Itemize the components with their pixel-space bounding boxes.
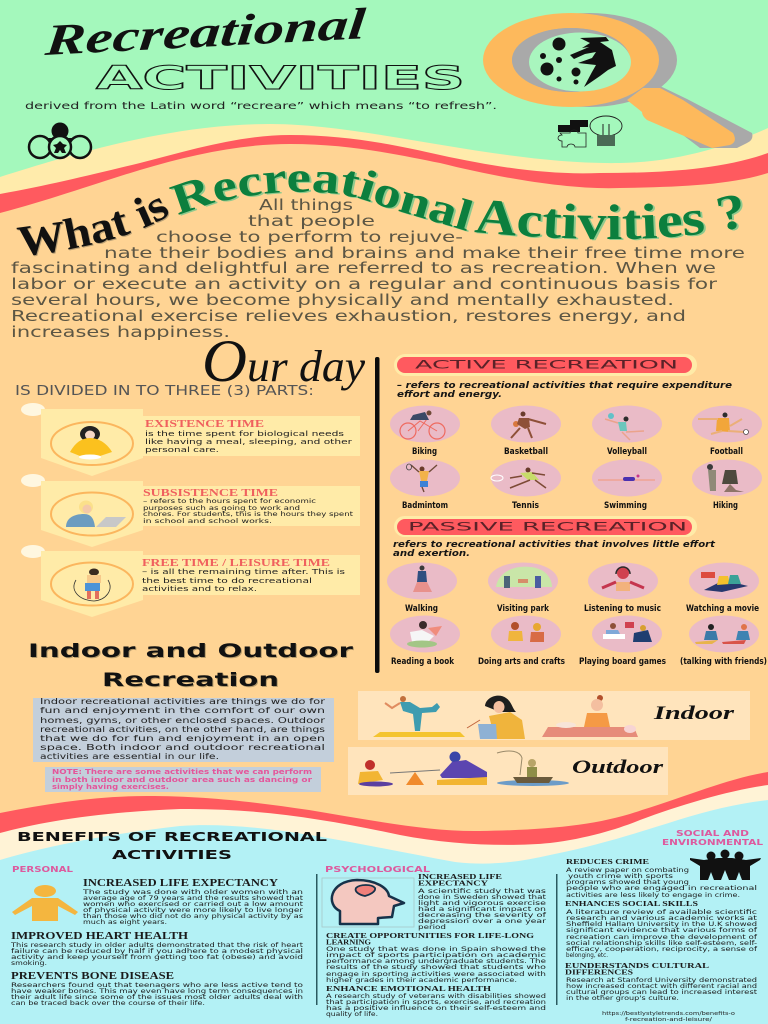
activity: doing arts and crafts: Doing arts and crafts (478, 656, 565, 666)
column: psychological benefits: ENHANCE EMOTIONAL HEALTH (326, 984, 491, 993)
column: social and environmental benefits: programs showed that young (566, 880, 689, 886)
activity: football: Football (710, 446, 743, 456)
panel: free time: activities and to relax. (142, 584, 257, 593)
icon: three people (690, 850, 761, 880)
column: psychological benefits: done in Sweden showed that (418, 895, 547, 901)
intro paragraph: nate their bodies and brains and make their free time more (104, 244, 745, 262)
activity: visiting park (488, 562, 558, 613)
text block: indoor and outdoor definition: that we do for fun and enjoyment in an open (40, 733, 325, 743)
note callout: NOTE: There are some activities that we can perform (52, 768, 312, 776)
source link text: f-recreation-and-leisure/ (625, 1017, 712, 1023)
passive recreation description: refers to recreational activities that involves little effort (393, 539, 716, 549)
column: psychological benefits: decreasing the severity of (418, 913, 548, 919)
subtitle: derived from the Latin word “recreare” which means “to refresh”. (25, 101, 497, 112)
column: personal benefits: their adult life since some of the issues most older adults deal with (11, 995, 303, 1001)
text block: indoor and outdoor definition: homes, gyms, or other enclosed spaces. Outdoor (40, 715, 326, 725)
activity: badminton: Badmintom (402, 500, 448, 510)
illustration: yoga pose (373, 696, 465, 737)
panel: free time (21, 545, 360, 617)
heading: indoor and outdoor recreation: Indoor and Outdoor (28, 640, 354, 662)
heading: benefits (17, 829, 327, 862)
icon: puzzle and light bulb (558, 116, 622, 147)
panel: subsistence time: in school and school works. (143, 518, 272, 525)
icon: person in yellow hoodie (70, 426, 112, 460)
panel: existence time: personal care. (145, 445, 219, 454)
activity: badminton (390, 460, 460, 510)
column: social and environmental benefits: people who are engaged in recreational (566, 886, 758, 892)
activity: playing board games (579, 616, 666, 666)
column: personal benefits: of physical activity were more likely to live longer (83, 908, 304, 914)
intro paragraph: labor or execute an activity on a regular and continuous basis for (11, 275, 718, 293)
intro paragraph: choose to perform to rejuve- (156, 228, 463, 246)
column: social and environmental benefits: how increased contact with different racial and (566, 984, 757, 990)
column: social and environmental benefits: DIFFERENCES (565, 968, 633, 976)
column: social and environmental benefits: youth crime with sports (568, 874, 673, 880)
label: social and environmental: SOCIAL AND (676, 829, 749, 838)
note callout: simply having exercises. (52, 783, 169, 791)
heading: What is (16, 198, 170, 256)
panel: existence time: like having a meal, sleeping, and other (145, 437, 353, 446)
column: social and environmental benefits: belonging, etc. (566, 953, 608, 959)
icon: child with jump rope (74, 568, 110, 601)
column: social and environmental benefits: Research at Stanford University demonstrated (566, 978, 757, 984)
heading: Activities ?: Activities ? (474, 196, 742, 240)
text block: indoor and outdoor definition: space. Both indoor and outdoor recreational (40, 742, 325, 752)
activity: watching a movie (686, 562, 759, 613)
column: social and environmental benefits: REDUCES CRIME (566, 857, 649, 866)
activity: walking: Walking (405, 603, 438, 613)
vertical divider (375, 357, 380, 673)
column: social and environmental benefits: social relationship skills like self-esteem, self- (566, 941, 757, 947)
column: personal benefits: IMPROVED HEART HEALTH (11, 931, 188, 942)
icon: person with laptop (66, 500, 126, 527)
activity: hiking (692, 460, 762, 510)
column: social and environmental benefits (565, 857, 758, 1002)
text block: indoor and outdoor definition: recreational activities, on the other hand, are things (40, 724, 325, 734)
subheading: three parts: IS DIVIDED IN TO THREE (3) PARTS: (15, 384, 314, 399)
column: psychological benefits: depression over a one year (418, 919, 547, 925)
heading: indoor and outdoor recreation: Recreation (102, 669, 279, 691)
activity: talking with friends (680, 616, 767, 666)
text block: indoor and outdoor definition: Indoor recreational activities are things we do for (40, 696, 326, 706)
pill: passive recreation: PASSIVE RECREATION (408, 520, 687, 534)
intro paragraph: fascinating and delightful are referred to as recreation. When we (11, 259, 716, 277)
panel: subsistence time (21, 474, 360, 547)
activity: watching a movie: Watching a movie (686, 603, 759, 613)
column: psychological benefits: engage in sporting activities were associated with (326, 972, 546, 978)
column: psychological benefits: that participation in sports, exercise, and recreation (326, 1000, 546, 1006)
label: personal: PERSONAL (12, 865, 73, 874)
column: social and environmental benefits: A literature review of available scientific (566, 910, 757, 916)
pill: passive recreation (394, 516, 697, 537)
column: personal benefits: activity and keep yourself from getting too fat (obese) and avoid (11, 955, 303, 961)
activity: doing arts and crafts (478, 616, 565, 666)
activity: listening to music: Listening to music (584, 603, 661, 613)
panel: indoor (358, 691, 750, 740)
panel: indoor: Indoor (653, 703, 735, 724)
icon: person (12, 885, 78, 921)
panel: existence time: is the time spent for biological needs (145, 429, 344, 438)
activity: basketball (491, 406, 561, 456)
label: psychological: PSYCHOLOGICAL (325, 865, 430, 874)
label: social and environmental: ENVIRONMENTAL (662, 838, 763, 847)
column: social and environmental benefits: significant evidence that various forms of (566, 928, 758, 934)
source link text: https://bestlystyletrends.com/benefits-o (602, 1011, 736, 1017)
heading: Recreational curved: Recreational (169, 170, 474, 232)
heading: Activities ? (474, 196, 742, 240)
column: psychological benefits: A research study of veterans with disabilities showed (326, 994, 546, 1000)
icon: magnifying glass with dancer (483, 13, 752, 148)
column: social and environmental benefits: Sheffield Hallam University in the U.K showed (566, 922, 757, 928)
column: social and environmental benefits: activities are less likely to engage in crime. (566, 893, 740, 899)
column: personal benefits: smoking. (11, 961, 47, 967)
activity: reading a book: Reading a book (391, 656, 454, 666)
column: social and environmental benefits: ENHANCES SOCIAL SKILLS (565, 899, 698, 908)
activity: football (692, 406, 762, 456)
illustration: man fishing in boat (497, 751, 569, 786)
heading: Recreational curved (169, 170, 474, 232)
panel: outdoor: Outdoor (572, 757, 664, 778)
intro paragraph: several hours, we become physically and mentally exhausted. (11, 291, 674, 309)
column: personal benefits: than those who did not do any physical activity by as (83, 914, 303, 920)
column: personal benefits: women who exercised or carried out a low amount (83, 902, 304, 908)
column: social and environmental benefits: cultural groups can lead to increased interest (566, 990, 758, 996)
passive recreation description: and exertion. (393, 548, 470, 558)
panel: subsistence time: chores. For students, this is the hours they spent (143, 511, 354, 518)
column: social and environmental benefits: A review paper on combating (566, 868, 689, 874)
activity: reading a book (390, 616, 460, 666)
panel: free time: the best time to do recreational (142, 576, 312, 585)
column: personal benefits: much as eight years. (83, 920, 167, 926)
activity: tennis (491, 460, 561, 510)
illustration: woman knitting (467, 696, 525, 739)
column: psychological benefits: LEARNING (326, 938, 371, 946)
intro paragraph (11, 196, 745, 341)
column: personal benefits: can be traced back over the course of their life. (11, 1001, 205, 1007)
heading: What is: What is (16, 198, 170, 256)
activity: playing board games: Playing board games (579, 656, 666, 666)
column: social and environmental benefits: EUNDERSTANDS CULTURAL (565, 961, 709, 970)
passive recreation description (393, 539, 716, 558)
heading: Our day: Our day (202, 328, 365, 394)
panel: outdoor (348, 747, 668, 795)
activity: volleyball (592, 406, 662, 456)
column: psychological benefits: performance among undergraduate students. The (326, 959, 547, 965)
heading: indoor and outdoor recreation (28, 640, 354, 691)
column: personal benefits: have weaker bones. This may even have long term consequences in (11, 989, 303, 995)
column: psychological benefits: One study that was done in Spain showed the (326, 947, 547, 953)
column: personal benefits: Researchers found out that teenagers who are less active tend to (11, 983, 304, 989)
activity: swimming: Swimming (604, 500, 647, 510)
activity: visiting park: Visiting park (497, 603, 549, 613)
column: psychological benefits: impact of sports participation on academic (326, 953, 546, 959)
text block: indoor and outdoor definition: activities are essential in our life. (40, 751, 219, 761)
column: psychological benefits: light and vigorous exercise (418, 901, 547, 907)
title: ACTIVITIES outlined: ACTIVITIES (96, 59, 465, 97)
column: personal benefits: average age of 79 years and the results showed that (83, 896, 304, 902)
active recreation description (397, 380, 732, 399)
active recreation description: – refers to recreational activities that require expenditure (397, 380, 732, 390)
activity: walking (387, 562, 457, 613)
panel: subsistence time: purposes such as going to work and (143, 505, 300, 512)
panel: free time: FREE TIME / LEISURE TIME (142, 557, 330, 569)
heading: benefits: ACTIVITIES (112, 847, 232, 862)
activity: hiking: Hiking (713, 500, 738, 510)
column: psychological benefits: has a positive influence on their self-esteem and (326, 1006, 546, 1012)
column: psychological benefits: results of the study showed that students who (326, 965, 547, 971)
column: personal benefits: The study was done with older women with an (81, 890, 303, 896)
source link text (602, 1011, 736, 1023)
column: social and environmental benefits: in the other group's culture. (566, 996, 679, 1002)
activity: volleyball: Volleyball (607, 446, 647, 456)
column: psychological benefits: EXPECTANCY (418, 878, 489, 888)
panel: existence time: EXISTENCE TIME (145, 418, 264, 430)
column: psychological benefits: had a significant impact on (418, 907, 546, 913)
column: social and environmental benefits: recreation can improve the development of (566, 935, 758, 941)
column: personal benefits: This research study in older adults demonstrated that the risk of heart (10, 943, 304, 949)
pill: active recreation (394, 354, 697, 376)
intro paragraph: that people (248, 212, 375, 230)
pill: active recreation: ACTIVE RECREATION (415, 358, 678, 372)
activity: biking: Biking (412, 446, 437, 456)
activity: tennis: Tennis (512, 500, 539, 510)
label: social and environmental (662, 829, 763, 847)
column: psychological benefits (326, 872, 548, 1018)
column: psychological benefits: higher grades in their academic performance. (326, 978, 517, 984)
active recreation description: effort and energy. (397, 389, 502, 399)
column: psychological benefits: CREATE OPPORTUNITIES FOR LIFE-LONG (326, 931, 534, 940)
divider line left (316, 874, 318, 1005)
panel: subsistence time: – refers to the hours spent for economic (143, 498, 316, 505)
column: personal benefits: PREVENTS BONE DISEASE (11, 971, 174, 982)
activity: biking (390, 406, 460, 456)
activity: basketball: Basketball (504, 446, 548, 456)
divider line right (556, 874, 558, 1005)
panel: subsistence time: SUBSISTENCE TIME (143, 487, 278, 499)
intro paragraph: Recreational exercise relieves exhaustion, restores energy, and (11, 307, 686, 325)
text block: indoor and outdoor definition: fun and enjoyment in the comfort of our own (40, 705, 325, 715)
column: psychological benefits: period (418, 925, 446, 931)
activity: listening to music (584, 562, 661, 613)
column: social and environmental benefits: efficacy, cooperation, reciprocity, a sense of (566, 947, 758, 953)
intro paragraph: increases happiness. (11, 323, 230, 341)
icon: three people in rings (29, 122, 91, 158)
column: personal benefits: failure can be reduced by half if you adhere to a modest physical (11, 949, 304, 955)
note callout (45, 767, 321, 792)
title: Recreational: Recreational (42, 0, 368, 65)
illustration: campers at fire (358, 752, 487, 786)
panel: existence time (21, 403, 360, 476)
column: social and environmental benefits: research and various academic works at (566, 916, 758, 922)
column: psychological benefits: A scientific study that was (418, 889, 546, 895)
intro paragraph: All things (259, 196, 353, 214)
activity: swimming (592, 460, 662, 510)
note callout: in both indoor and outdoor area such as dancing or (52, 776, 313, 784)
panel: free time: – is all the remaining time after. This is (142, 567, 345, 576)
column: psychological benefits: INCREASED LIFE (418, 872, 502, 881)
column: psychological benefits: quality of life. (326, 1012, 378, 1018)
column: personal benefits (10, 878, 304, 1007)
bottom wave background (0, 772, 768, 1024)
icon: head with heart (322, 878, 414, 927)
heading: benefits: BENEFITS OF RECREATIONAL (17, 829, 327, 844)
column: personal benefits: INCREASED LIFE EXPECTANCY (83, 878, 279, 889)
illustration: woman baking (542, 695, 638, 737)
text block: indoor and outdoor definition (33, 696, 334, 762)
